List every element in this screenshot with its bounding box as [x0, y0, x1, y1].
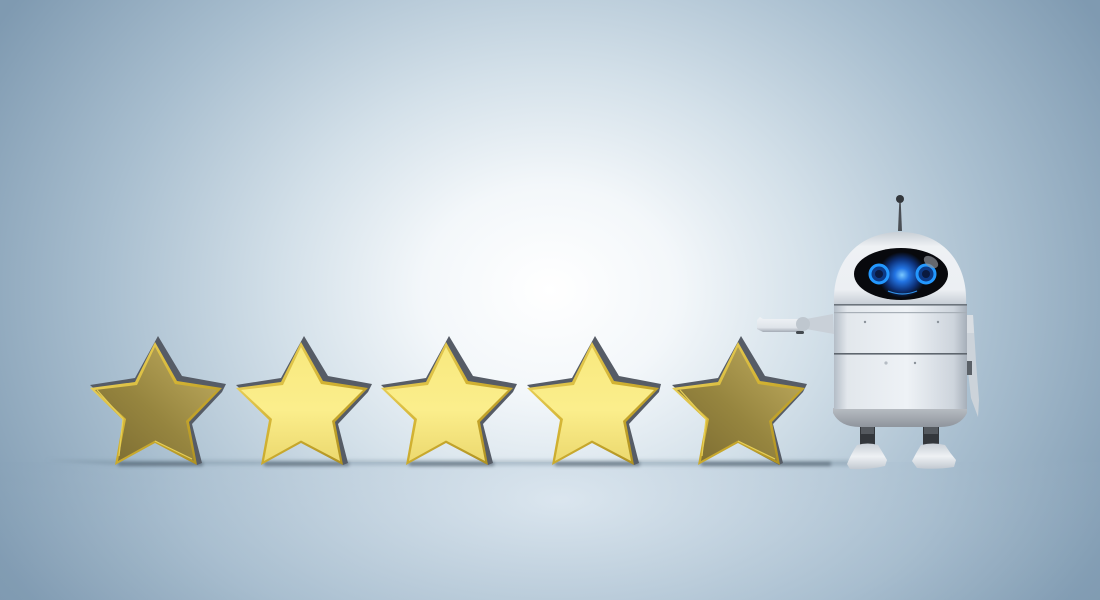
robot legs: [860, 427, 939, 447]
ground shadow: [45, 460, 850, 466]
icon: antenna: [896, 195, 904, 231]
robot visor face: [854, 248, 948, 300]
robot body: [834, 304, 967, 409]
star 2: [236, 336, 372, 465]
robot feet: [847, 444, 956, 469]
star 1: [90, 336, 226, 465]
floor: [0, 462, 1100, 600]
star 5: [672, 336, 807, 465]
star 4: [527, 336, 661, 465]
robot: [757, 195, 979, 469]
robot left arm: [757, 314, 834, 334]
robot base: [833, 408, 967, 427]
robot head: [834, 232, 966, 304]
robot right arm: [966, 315, 979, 417]
star 3: [381, 336, 517, 465]
